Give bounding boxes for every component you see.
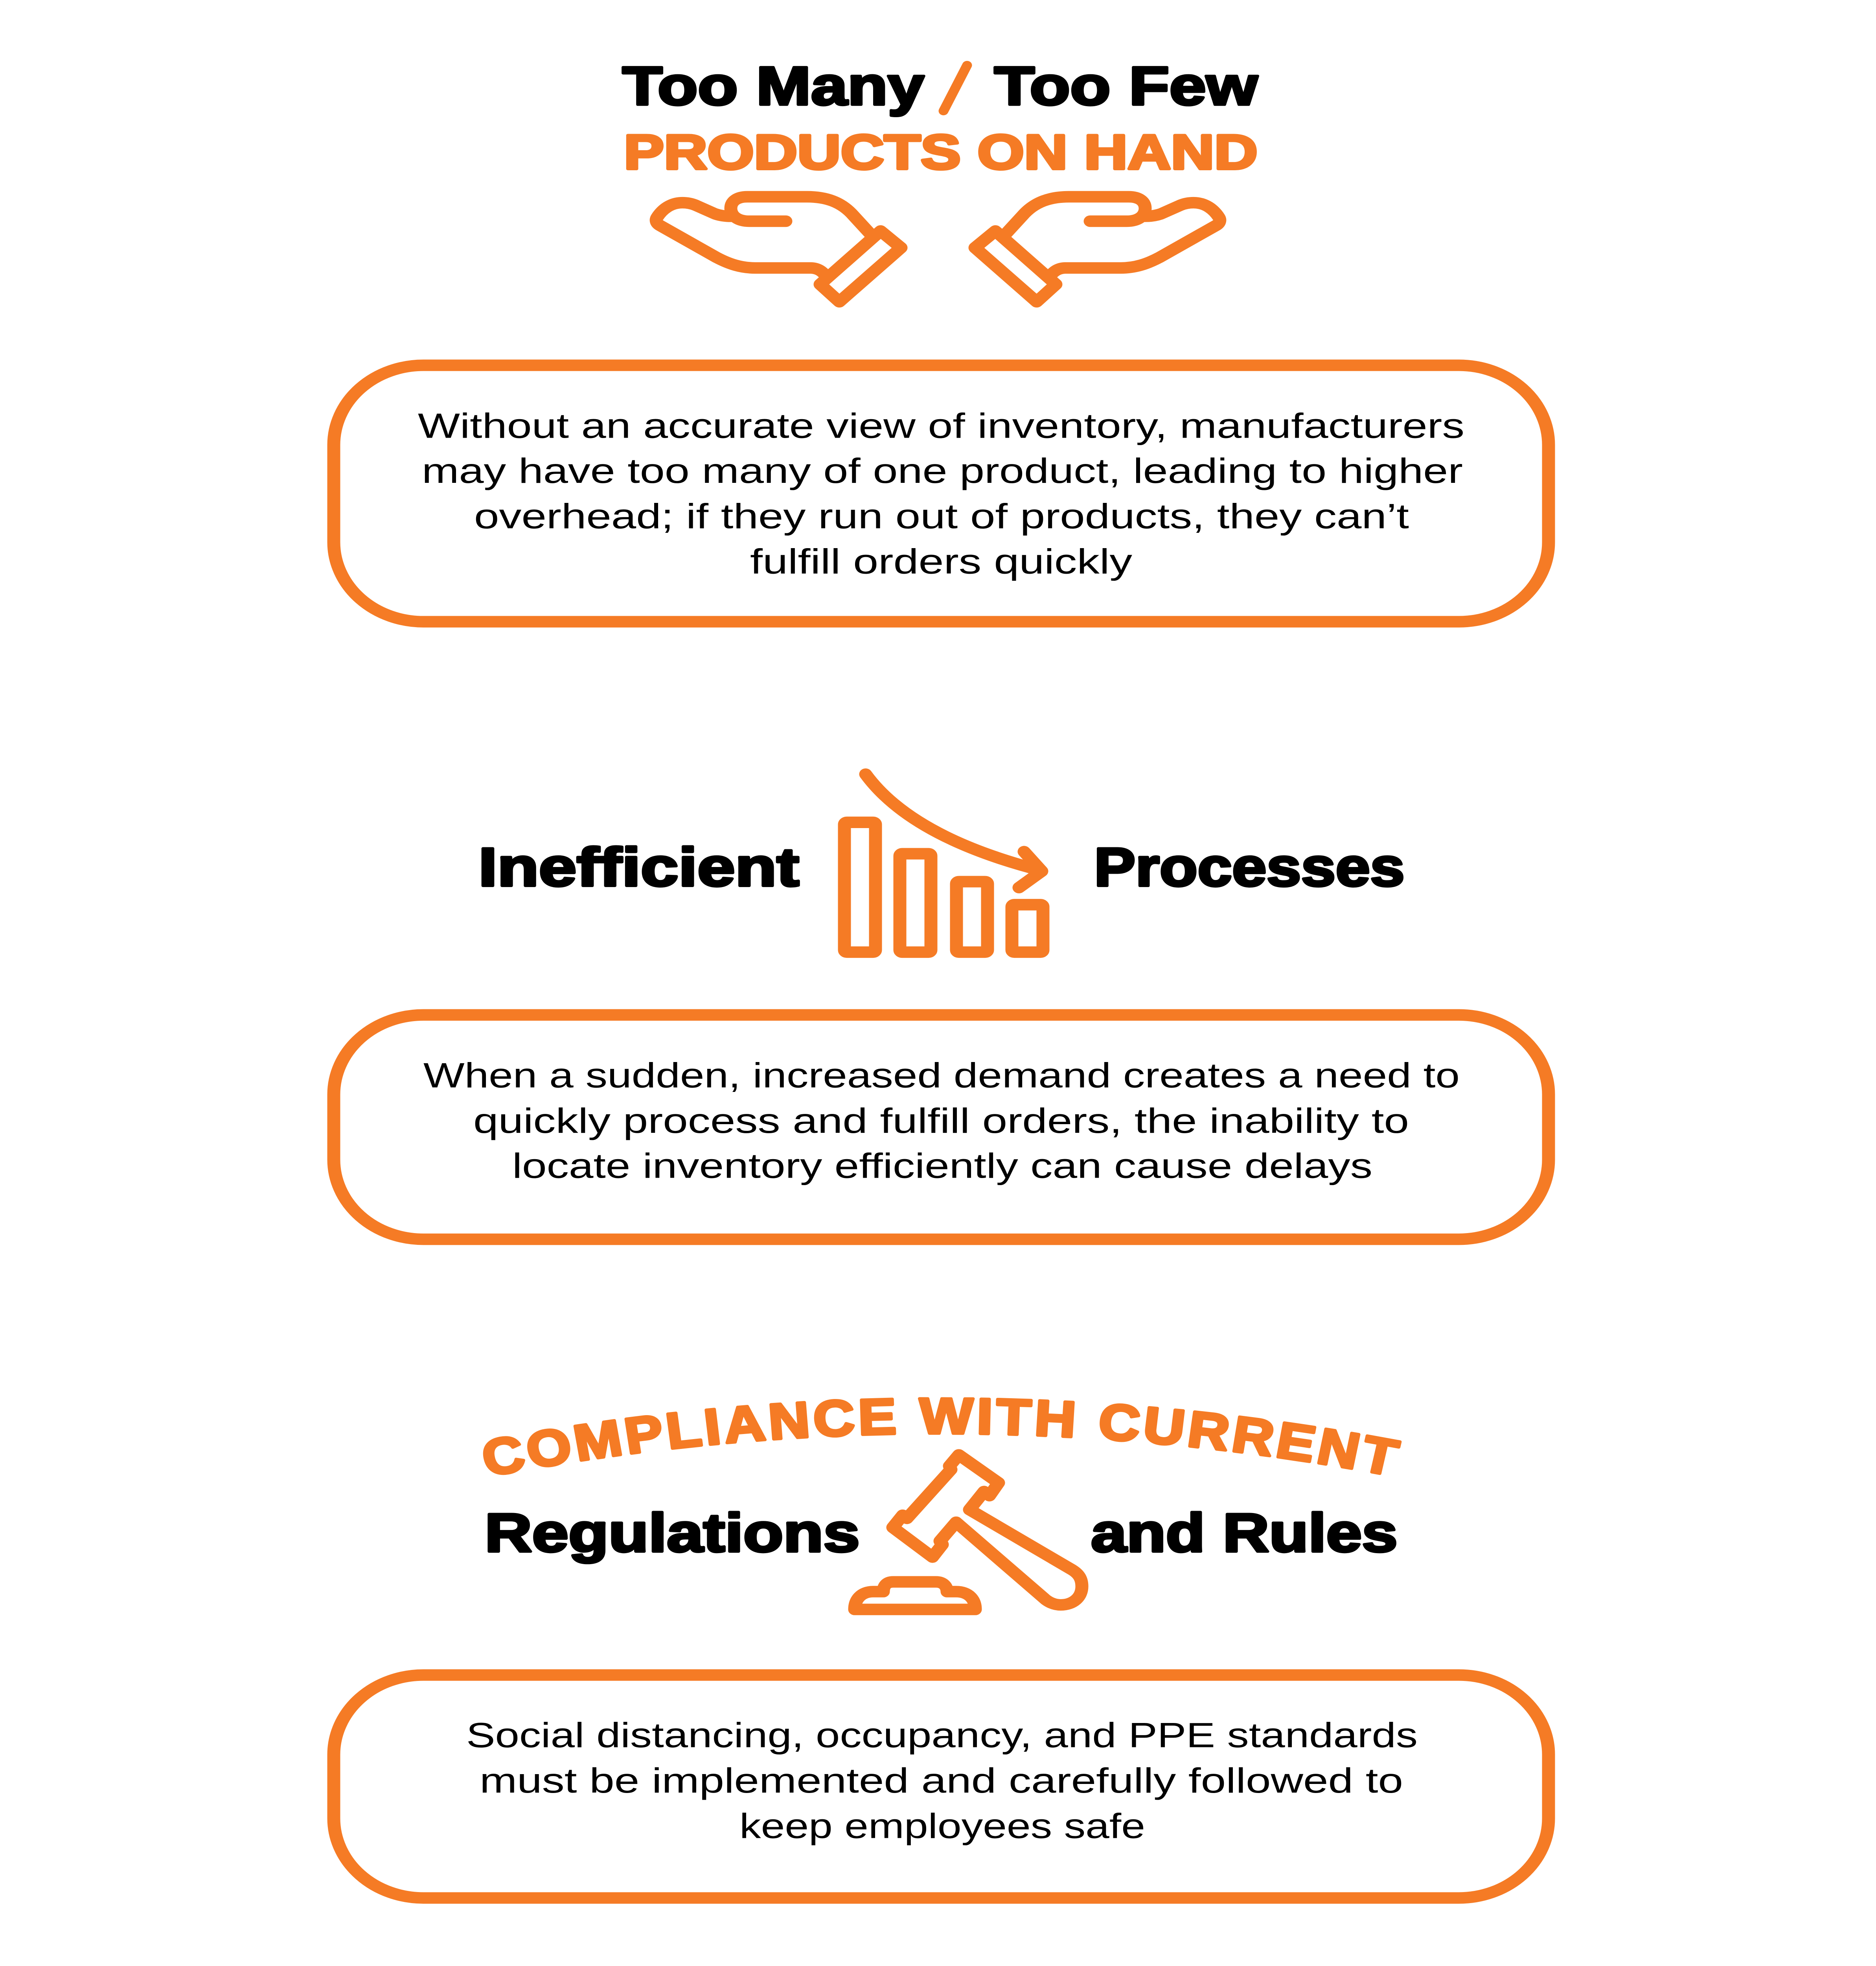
section: too many / too few bbox=[334, 55, 1549, 622]
section: compliance bbox=[334, 1388, 1549, 1898]
icon: left hand bbox=[656, 197, 901, 302]
panel: sudden demand callout bbox=[334, 1015, 1549, 1239]
panel: sudden demand callout: locate inventory efficiently can cause delays bbox=[512, 1147, 1372, 1185]
panel: inventory view callout: may have too many of one product, leading to higher bbox=[422, 451, 1463, 491]
heading: and rules: and Rules bbox=[1091, 1502, 1398, 1563]
subheading: products on hand: PRODUCTS ON HAND bbox=[624, 125, 1258, 180]
icon: right hand bbox=[975, 197, 1220, 302]
heading: too many / too few: Too Few bbox=[994, 55, 1258, 116]
curved heading: compliance with current: COMPLIANCE WITH CURRENT bbox=[477, 1388, 1406, 1487]
icon: gavel bbox=[855, 1455, 1082, 1609]
panel: sudden demand callout: When a sudden, increased demand creates a need to bbox=[423, 1056, 1460, 1095]
panel: safety standards callout: Social distancing, occupancy, and PPE standards bbox=[466, 1716, 1418, 1755]
panel: inventory view callout: fulfill orders quickly bbox=[750, 542, 1133, 581]
heading: inefficient: Inefficient bbox=[478, 837, 799, 898]
panel: safety standards callout: keep employees safe bbox=[739, 1807, 1145, 1846]
panel: inventory view callout bbox=[334, 365, 1549, 622]
panel: inventory view callout: overhead; if they run out of products, they can’t bbox=[474, 497, 1409, 536]
panel: sudden demand callout: quickly process and fulfill orders, the inability to bbox=[473, 1101, 1409, 1141]
panel: inventory view callout: Without an accurate view of inventory, manufacturers bbox=[418, 407, 1464, 445]
heading: too many / too few: Too Many bbox=[622, 55, 924, 116]
section: inefficient processes bbox=[334, 774, 1549, 1239]
panel: safety standards callout bbox=[334, 1675, 1549, 1898]
icon: declining bar chart with arrow bbox=[844, 774, 1043, 952]
heading: regulations: Regulations bbox=[485, 1502, 860, 1563]
heading: processes: Processes bbox=[1094, 837, 1405, 898]
heading: too many / too few bbox=[622, 55, 1258, 116]
panel: safety standards callout: must be implemented and carefully followed to bbox=[480, 1761, 1403, 1800]
